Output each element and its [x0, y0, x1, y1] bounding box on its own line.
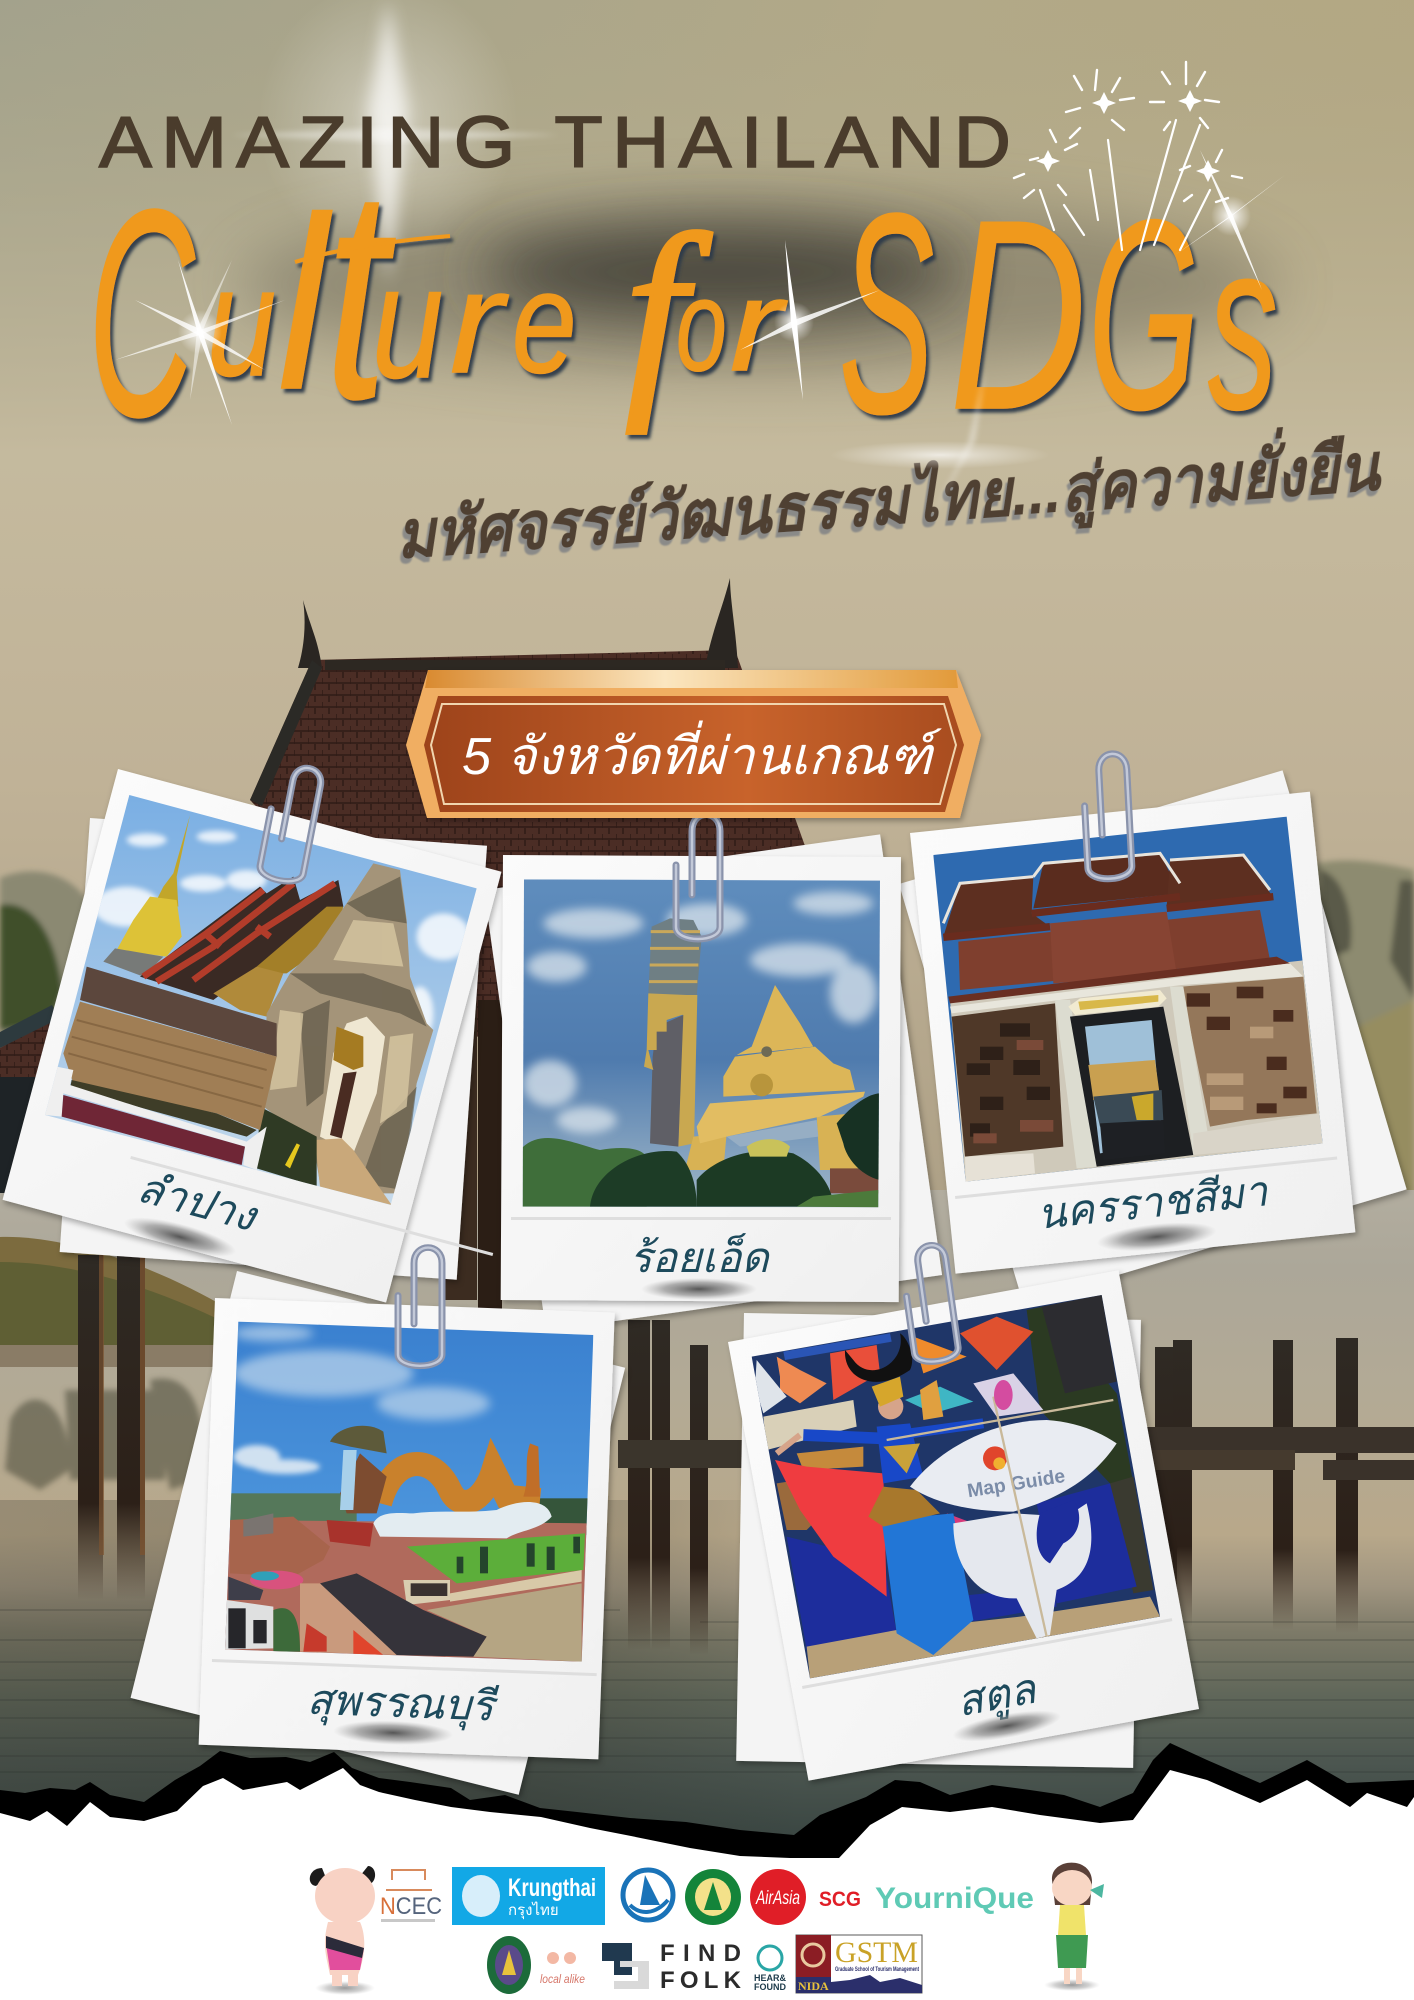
logo: green seal: [685, 1869, 741, 1925]
logo: GSTM NIDA: NIDA: [798, 1979, 829, 1993]
label shadow: [121, 1209, 239, 1265]
logo: Hear and Found: [754, 1946, 786, 1992]
label: Nakhon Ratchasima: นครราชสีมา: [1035, 1167, 1271, 1238]
heading: Culture for SDGs: l: [278, 167, 333, 441]
logo: NCEC: [380, 1870, 442, 1922]
heading: Culture for SDGs: C: [88, 149, 196, 478]
label shadow: [641, 1278, 757, 1300]
heading: Culture for SDGs: f: [625, 190, 712, 434]
heading: Culture for SDGs: t: [325, 127, 395, 461]
heading: Culture for SDGs: G: [1088, 163, 1199, 465]
paperclip: Lampang: [258, 763, 323, 885]
heading: Culture for SDGs: e: [512, 241, 577, 403]
heading: Culture for SDGs: r: [730, 253, 788, 398]
logo: Krungthai: [452, 1867, 605, 1925]
logo: GSTM NIDA: [796, 1935, 922, 1993]
photo: Roi Et tower: [520, 877, 883, 1210]
paperclip: Roi Et: [676, 814, 720, 939]
heading: Culture for SDGs: S: [839, 154, 934, 473]
logo: NCEC: NCEC: [380, 1893, 442, 1920]
logo: GSTM NIDA: GSTM: [835, 1936, 918, 1969]
logo: Krungthai: Krungthai: [508, 1874, 596, 1902]
label shadow: [333, 1719, 454, 1747]
banner text: 5 จังหวัดที่ผ่านเกณฑ์: [462, 720, 942, 786]
logo: Hear and Found: FOUND: [754, 1982, 786, 1992]
background: temple roof: [0, 578, 810, 1330]
paperclip: Suphan Buri: [398, 1248, 442, 1366]
logo: YourniQue: YourniQue: [875, 1882, 1034, 1915]
fireworks decoration: [1014, 62, 1242, 250]
heading: Culture for SDGs: D: [950, 165, 1086, 466]
background: wooden jetty posts: [78, 1255, 1414, 1655]
polaroid: Lampang: [3, 769, 501, 1303]
photo: Satun kite dancer: [747, 1290, 1167, 1683]
logo: FIND FOLK second line: FOLK: [660, 1967, 742, 1994]
sparkle: soft glow behind title: [230, 0, 560, 285]
heading: Culture for SDGs: u: [372, 232, 443, 411]
title: AMAZING THAILAND: AMAZING THAILAND: [99, 102, 1011, 183]
polaroid: Nakhon Ratchasima: [910, 792, 1355, 1274]
logo: AirAsia: AirAsia: [755, 1888, 800, 1909]
paperclip: Nakhon Ratchasima: [1082, 753, 1132, 880]
label shadow: [951, 1704, 1063, 1748]
polaroid: Satun: [728, 1270, 1199, 1781]
label shadow: [1096, 1218, 1218, 1256]
background: lake water: [0, 1190, 1414, 1840]
heading: Culture for SDGs: [88, 127, 1278, 478]
photo: Suphan Buri dragon: [220, 1320, 597, 1667]
heading: Culture for SDGs: o: [676, 252, 727, 398]
sparkles over heading: [115, 150, 1285, 520]
back papers: [60, 770, 1407, 1795]
heading: Culture for SDGs: s: [1208, 190, 1278, 459]
logo: Find Folk icon: [602, 1943, 649, 1989]
torn paper footer: [0, 1743, 1414, 2000]
heading: Culture for SDGs: r: [450, 242, 509, 403]
label: Suphan Buri: สุพรรณบุรี: [306, 1676, 500, 1732]
mascot: girl: [1044, 1863, 1104, 1991]
logo: university seal: [487, 1936, 531, 1994]
background: misty trees on horizon: [0, 860, 1414, 1195]
polaroid: Roi Et: [501, 855, 901, 1302]
logo: FIND FOLK: FIND: [660, 1940, 741, 1967]
label: Lampang: ลำปาง: [133, 1163, 263, 1240]
logo: GSTM NIDA: Graduate School of Tourism Management: [835, 1967, 919, 1973]
label: Satun: สตูล: [953, 1664, 1042, 1727]
logo: blue circle: [623, 1870, 673, 1920]
label: Roi Et: ร้อยเอ็ด: [629, 1233, 771, 1281]
photo: Lampang temple: [33, 790, 480, 1210]
polaroid: Suphan Buri: [199, 1298, 615, 1759]
background: dark haze behind title: [240, 200, 1280, 370]
heading: Culture for SDGs: u: [207, 235, 276, 408]
photo: Korat city gate: [930, 813, 1330, 1187]
banner: 5 provinces: [406, 670, 981, 818]
mascot: boy: [310, 1866, 375, 1995]
logo: SCG: SCG: [819, 1888, 861, 1911]
logo: Krungthai: กรุงไทย: [508, 1901, 559, 1920]
photo: Satun kite dancer: Map Guide: [966, 1466, 1067, 1502]
paperclip: Satun: [900, 1243, 960, 1364]
logo: local alike: local alike: [540, 1972, 585, 1986]
logo: local alike: [540, 1952, 585, 1986]
logo: AirAsia: [750, 1869, 806, 1925]
logo: Hear and Found: HEAR&: [754, 1973, 786, 1983]
